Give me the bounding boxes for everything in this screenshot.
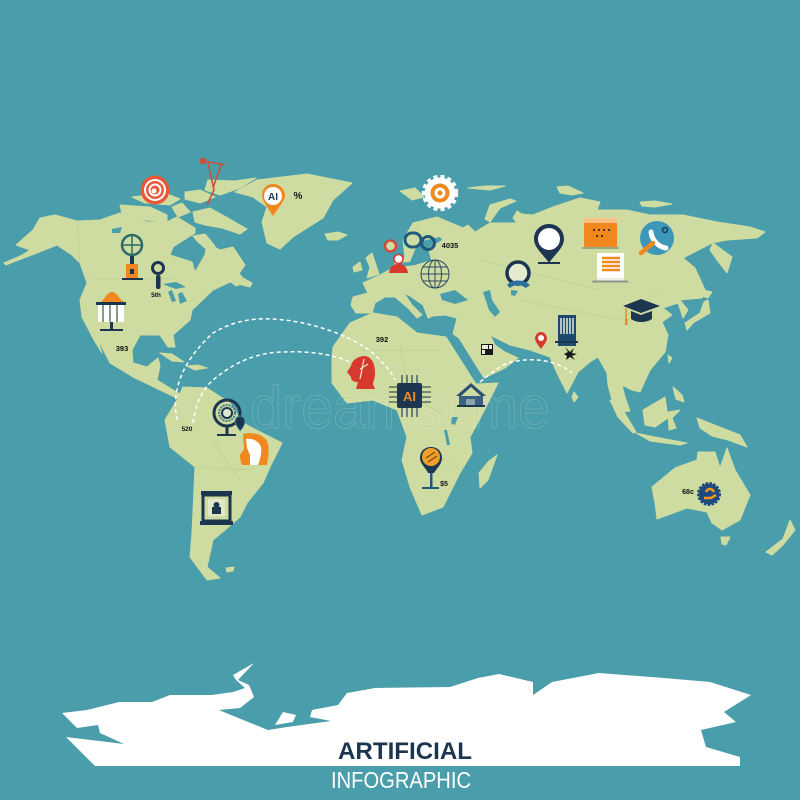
Borneo: [643, 397, 668, 427]
Lake Tanganyika: [444, 430, 450, 445]
label: 392: 392: [376, 335, 388, 344]
icon: bank building: [96, 292, 126, 331]
icon: AI location pin: [262, 184, 285, 216]
Eurasia: [351, 198, 765, 412]
icon: AI location pin: AI: [268, 192, 278, 203]
label: 520: 520: [182, 426, 193, 433]
Caspian Sea: [483, 290, 500, 317]
United Kingdom: [366, 253, 379, 278]
island: [557, 186, 583, 195]
icon: orange ball on stand: [420, 447, 442, 489]
arc: Africa to India: [480, 360, 572, 382]
Arctic Canada islands: [120, 178, 256, 286]
Tasmania: [721, 537, 730, 545]
Madagascar: [479, 455, 497, 488]
icon: laurel ring: [507, 262, 530, 288]
icon: black fan: [564, 347, 577, 360]
icon: small red pin: [535, 332, 547, 349]
label: 4035: 4035: [442, 241, 458, 250]
icon: small grid: [481, 344, 493, 355]
Great Lakes: [163, 282, 187, 304]
island: [468, 186, 505, 190]
Lake Winnipeg: [112, 227, 122, 233]
Hokkaido: [702, 290, 712, 298]
Arctic Russia islands: [400, 186, 672, 222]
icon: orange head: [240, 433, 269, 465]
Java: [636, 433, 687, 445]
icon: red ring: [385, 240, 396, 252]
label: $5: $5: [440, 481, 448, 488]
subtitle: INFOGRAPHIC: [331, 767, 471, 793]
Antarctica: [62, 663, 751, 766]
island: [132, 193, 180, 205]
icon: wire globe: [421, 260, 449, 288]
Kamchatka: [710, 243, 732, 273]
Japan: [685, 300, 710, 330]
icon: wheel on stand: [214, 400, 240, 436]
icon: temple house: [456, 383, 486, 407]
Hispaniola: [187, 365, 207, 370]
icon: small navy pin: [235, 416, 245, 431]
Novaya Zemlya: [485, 199, 516, 222]
Philippines: [673, 387, 684, 402]
Sulawesi: [668, 410, 680, 430]
Aral Sea: [511, 290, 518, 296]
Falklands: [226, 567, 234, 572]
island: [640, 201, 672, 207]
icon: red person: [389, 254, 408, 273]
island: [172, 203, 190, 217]
Iceland: [325, 232, 347, 240]
icon: red head: [347, 356, 375, 389]
icon: white gear: [424, 176, 456, 210]
inland water bodies: [112, 227, 518, 445]
Baltic Sea: [398, 237, 442, 267]
icon: laptop: [593, 253, 628, 282]
icon: monument: [200, 491, 233, 525]
island: [205, 178, 256, 195]
New Zealand: [766, 520, 795, 555]
Sri Lanka: [572, 392, 578, 402]
Alaska peninsula: [4, 250, 36, 265]
island: [193, 208, 247, 234]
Africa: [332, 313, 498, 515]
Antarctic island: [275, 712, 296, 725]
New Guinea: [697, 418, 747, 447]
arc: South America to Africa outer: [175, 319, 395, 420]
icon: chain links: [405, 233, 434, 250]
island: [185, 190, 215, 203]
icon: target: [140, 176, 170, 204]
country borders: [77, 221, 660, 480]
title: ARTIFICIAL: [338, 738, 472, 765]
North America: [8, 213, 252, 398]
Svalbard: [400, 188, 424, 200]
label: 68c: 68c: [682, 489, 694, 496]
icon: graduation cap: [623, 299, 660, 325]
island: [193, 234, 215, 248]
Sumatra: [610, 400, 636, 433]
icon: navy pin: [534, 224, 564, 264]
icon: magnifier: [152, 262, 164, 289]
icon: AI chip: [389, 375, 431, 417]
icon: red compass marker: [200, 158, 225, 205]
label: 393: 393: [116, 344, 128, 353]
icon: barcode document: [555, 315, 578, 346]
world map: [4, 174, 795, 580]
Taiwan: [668, 355, 672, 363]
Greenland: [235, 174, 352, 249]
Antarctic mainland: [62, 663, 751, 766]
South America: [165, 387, 282, 580]
watermark: dreamstime: [250, 374, 550, 441]
Australia: [652, 448, 750, 530]
dashed connection arcs: [175, 319, 572, 423]
icon: navy gear: [698, 483, 720, 505]
label: percent: %: [294, 191, 303, 202]
label: 5th: 5th: [151, 292, 161, 299]
Black Sea: [440, 290, 468, 304]
Newfoundland: [226, 272, 246, 286]
arc: South America to Africa inner: [193, 352, 350, 423]
icon: orange control panel: [582, 218, 619, 249]
icon: phone circle: [640, 221, 674, 255]
Lake Victoria: [451, 417, 458, 425]
icon: AI chip: AI: [403, 389, 416, 404]
Ireland: [353, 262, 362, 272]
Caribbean islands: [160, 353, 184, 362]
island: [120, 205, 167, 222]
icon: globe on stand: [122, 235, 143, 280]
